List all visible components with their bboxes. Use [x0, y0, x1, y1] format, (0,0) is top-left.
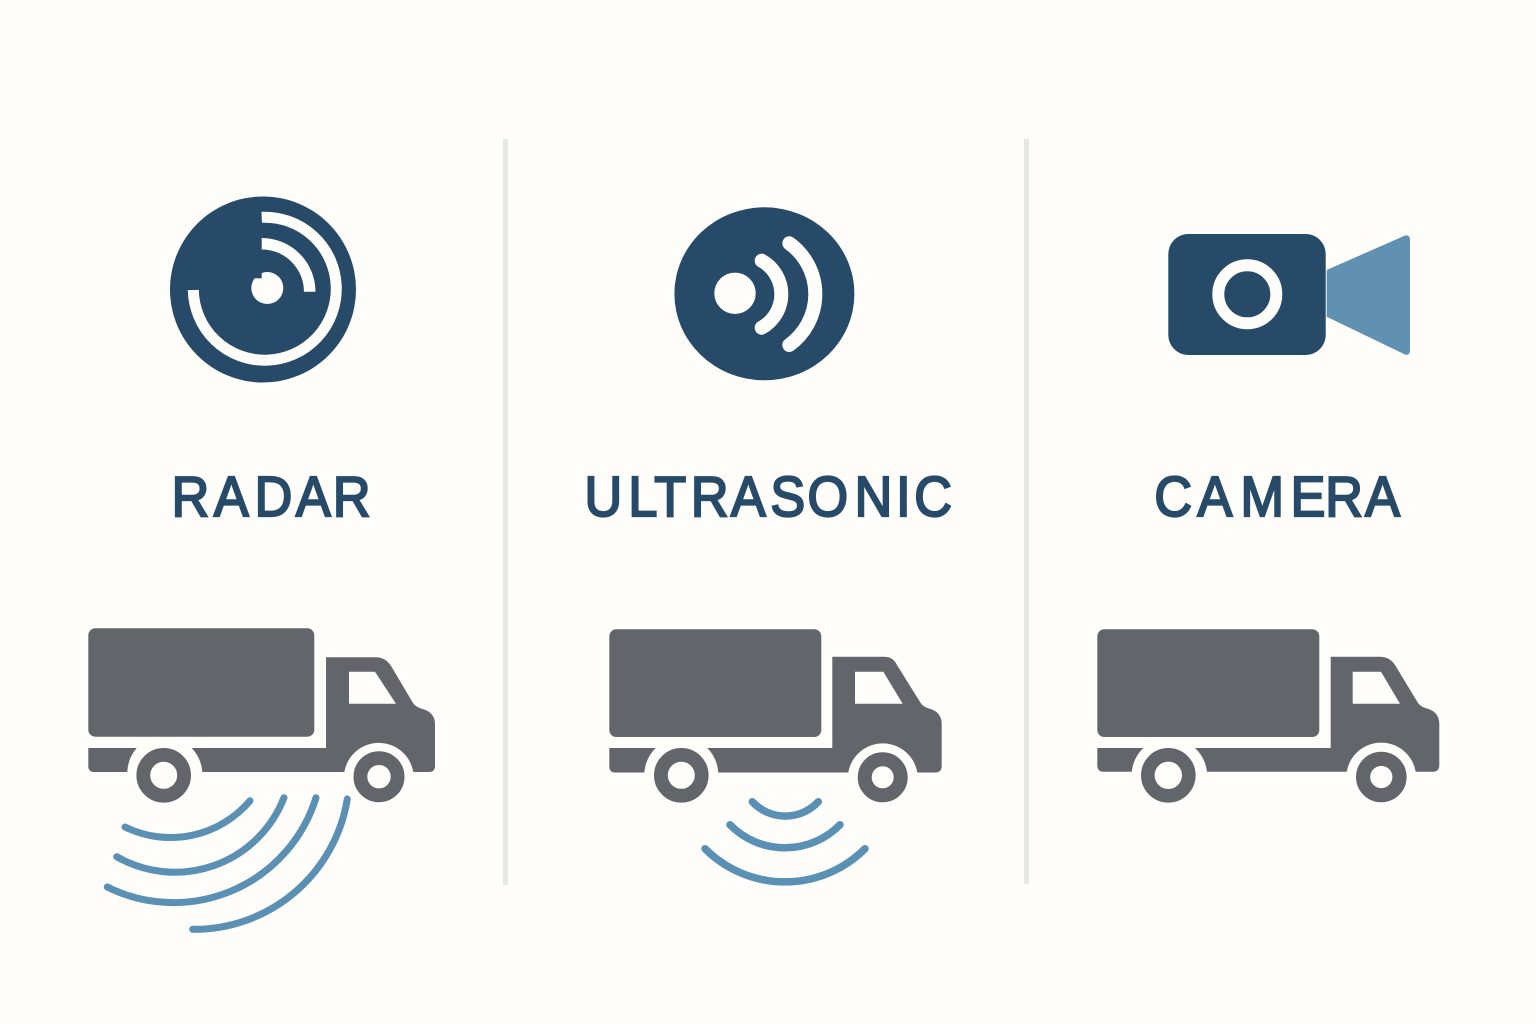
icon: video camera — [1168, 234, 1410, 355]
panel: camera — [1097, 234, 1439, 796]
heading: camera: CAMERA — [1154, 465, 1401, 528]
icon: radar dial — [170, 196, 356, 382]
icon: truck with ultrasonic waves — [609, 629, 942, 882]
panel: ultrasonic — [584, 207, 952, 882]
heading: radar: RADAR — [172, 465, 371, 528]
panel: radar — [88, 196, 435, 929]
icon: truck — [1097, 629, 1439, 796]
icon: truck with radar waves — [88, 628, 435, 929]
heading: ultrasonic: ULTRASONIC — [584, 465, 952, 528]
icon: ultrasonic emitter — [674, 207, 854, 380]
